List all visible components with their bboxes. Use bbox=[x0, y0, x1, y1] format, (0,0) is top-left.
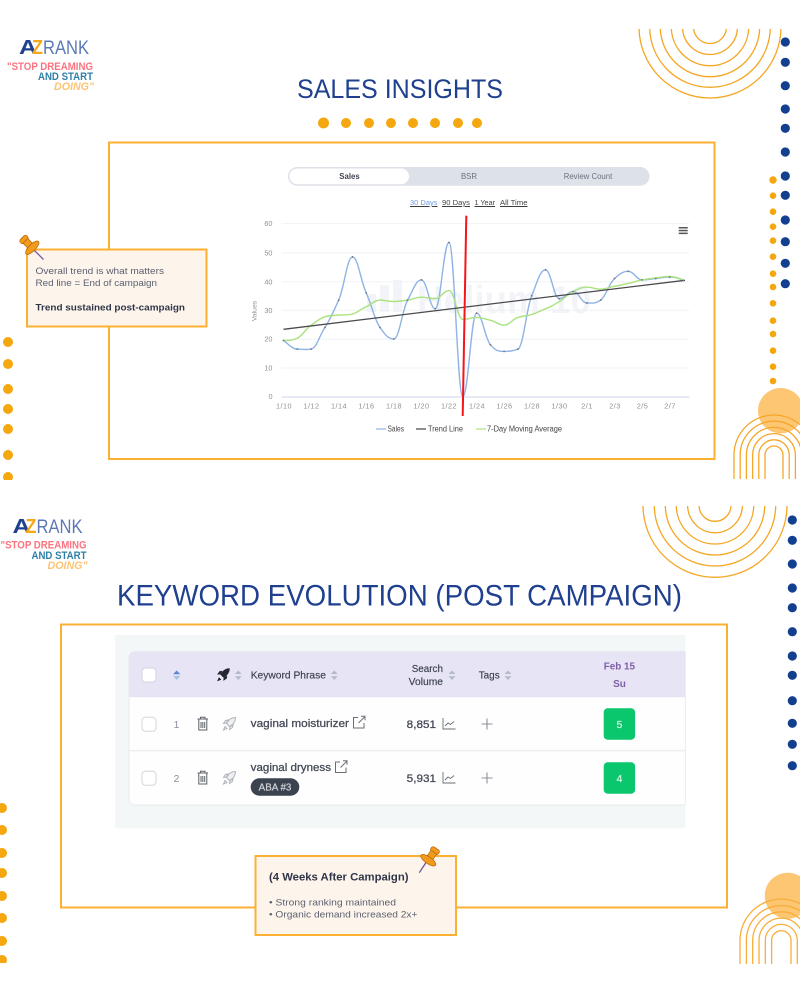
callout: overall trend: Red line = End of campaign bbox=[36, 278, 157, 289]
logo: AZRank bottom: RANK bbox=[36, 517, 83, 538]
row 1: vaginal moisturizer: vaginal moisturizer bbox=[251, 718, 349, 730]
table body bbox=[129, 652, 685, 805]
header row: Search bbox=[412, 664, 443, 675]
red line: end of campaign bbox=[463, 216, 466, 416]
decoration: sun and arches lower right of top section bbox=[734, 388, 800, 479]
row 1: vaginal moisturizer: 8,851 bbox=[407, 719, 436, 731]
x axis labels: 1/14 bbox=[331, 401, 347, 410]
callout: 4 weeks after campaign bbox=[256, 856, 456, 935]
logo: AZRank bottom bbox=[0, 516, 88, 572]
y axis labels: 40 bbox=[264, 277, 272, 286]
x axis labels: 1/26 bbox=[496, 401, 513, 410]
chart watermark: Helium 10 bbox=[417, 279, 591, 322]
logo: AZRank bottom: DOING" bbox=[48, 560, 88, 572]
title: keyword evolution: KEYWORD EVOLUTION (POST CAMPAIGN) bbox=[117, 580, 682, 612]
title: sales insights: SALES INSIGHTS bbox=[297, 74, 503, 104]
chart range selector: 1 Year bbox=[474, 198, 495, 207]
logo: AZRank bottom: A bbox=[12, 516, 30, 538]
row 2: vaginal dryness: vaginal dryness bbox=[251, 762, 331, 774]
row 2: vaginal dryness bbox=[142, 761, 635, 796]
x axis labels: 1/10 bbox=[276, 401, 292, 410]
row 1: vaginal moisturizer: 5 bbox=[616, 719, 622, 731]
callout: overall trend: Trend sustained post-campaign bbox=[36, 302, 185, 314]
logo: AZRank top bbox=[7, 37, 95, 93]
trend line bbox=[284, 280, 685, 329]
table header bbox=[129, 652, 685, 697]
x axis labels: 2/7 bbox=[664, 401, 676, 410]
x axis labels: 2/1 bbox=[581, 401, 593, 410]
callout: 4 weeks after campaign: • Strong ranking maintained bbox=[269, 898, 396, 908]
keyword table screenshot bbox=[115, 635, 685, 828]
header row: Tags bbox=[479, 670, 500, 682]
logo: AZRank bottom: AND START bbox=[32, 550, 87, 562]
chart menu icon bbox=[679, 227, 688, 234]
panel: keyword frame bbox=[61, 624, 727, 908]
chart legend bbox=[376, 425, 562, 434]
chart range selector: 30 Days bbox=[410, 198, 438, 207]
line chart: sales trend bbox=[252, 216, 689, 434]
header row: Feb 15 bbox=[604, 662, 635, 672]
data point markers bbox=[283, 242, 684, 352]
sales line bbox=[284, 242, 683, 397]
y axis labels bbox=[264, 219, 272, 401]
x axis labels bbox=[276, 401, 676, 410]
x axis labels: 1/18 bbox=[386, 401, 402, 410]
logo: AZRank top: A bbox=[19, 37, 37, 59]
row 1: vaginal moisturizer: 1 bbox=[174, 720, 180, 731]
dotted divider under title bbox=[318, 118, 482, 128]
x axis labels: 1/28 bbox=[524, 401, 540, 410]
logo: AZRank bottom: Z bbox=[26, 516, 36, 538]
chart legend: 7-Day Moving Average bbox=[487, 425, 562, 434]
y axis title: Values bbox=[252, 300, 258, 321]
chart tabs: Sales bbox=[339, 172, 360, 181]
logo: AZRank top: RANK bbox=[43, 38, 89, 59]
logo: AZRank bottom: "STOP DREAMING bbox=[0, 540, 87, 552]
decoration: orange dots right bbox=[769, 176, 777, 384]
header row: Volume bbox=[409, 677, 443, 688]
header row bbox=[142, 662, 635, 690]
y axis labels: 50 bbox=[264, 248, 272, 258]
logo: AZRank top: Z bbox=[32, 37, 43, 59]
decoration: blue dots bottom right bbox=[788, 515, 797, 770]
x axis labels: 2/3 bbox=[609, 401, 621, 410]
logo: AZRank top: "STOP DREAMING bbox=[7, 61, 93, 73]
chart range selector: 90 Days bbox=[442, 198, 470, 207]
chart legend: Trend Line bbox=[428, 425, 463, 434]
panel: sales chart frame bbox=[109, 142, 714, 459]
callout: 4 weeks after campaign: • Organic demand increased 2x+ bbox=[269, 910, 418, 920]
x axis labels: 2/5 bbox=[637, 401, 648, 410]
y axis labels: 30 bbox=[264, 306, 272, 315]
logo: AZRank top: DOING" bbox=[54, 81, 95, 93]
header row: Keyword Phrase bbox=[251, 670, 326, 682]
icon: push pin top bbox=[16, 231, 44, 260]
x axis labels: 1/30 bbox=[551, 401, 568, 410]
chart tabs: Review Count bbox=[564, 172, 613, 181]
row 1: vaginal moisturizer bbox=[142, 708, 635, 740]
chart tabs: BSR bbox=[461, 172, 477, 181]
y axis labels: 0 bbox=[268, 392, 272, 401]
callout: 4 weeks after campaign: (4 Weeks After Campaign) bbox=[269, 872, 409, 884]
decoration: blue dots top right bbox=[781, 37, 790, 288]
row 2: vaginal dryness: 4 bbox=[616, 773, 622, 785]
row 2: vaginal dryness: 5,931 bbox=[407, 773, 436, 785]
row 2: vaginal dryness: ABA #3 bbox=[259, 782, 292, 794]
logo: AZRank top: AND START bbox=[38, 71, 93, 83]
x axis labels: 1/24 bbox=[469, 401, 485, 410]
callout: overall trend: Overall trend is what matters bbox=[36, 266, 164, 277]
y axis labels: 20 bbox=[264, 335, 272, 344]
x axis labels: 1/12 bbox=[303, 401, 320, 410]
y axis labels: 60 bbox=[264, 219, 272, 228]
x axis labels: 1/20 bbox=[413, 401, 430, 410]
decoration: orange dots left top section bbox=[3, 337, 13, 482]
chart legend: Sales bbox=[388, 425, 404, 434]
header row: Su bbox=[613, 679, 626, 690]
chart tabs bbox=[288, 167, 650, 186]
y axis labels: 10 bbox=[264, 364, 272, 372]
row 2: vaginal dryness: 2 bbox=[174, 774, 180, 785]
x axis labels: 1/22 bbox=[441, 401, 457, 410]
callout: overall trend bbox=[27, 250, 206, 326]
decoration: orange dots left bottom section bbox=[0, 803, 7, 965]
chart range selector: All Time bbox=[500, 198, 528, 207]
moving average line bbox=[284, 276, 683, 341]
icon: push pin bottom bbox=[419, 843, 444, 873]
chart range selector bbox=[410, 198, 528, 207]
decoration: sun and arches bottom right bbox=[740, 873, 800, 964]
x axis labels: 1/16 bbox=[358, 401, 375, 410]
decoration: concentric arcs top bbox=[638, 29, 782, 99]
decoration: concentric arcs bottom bbox=[642, 506, 788, 578]
